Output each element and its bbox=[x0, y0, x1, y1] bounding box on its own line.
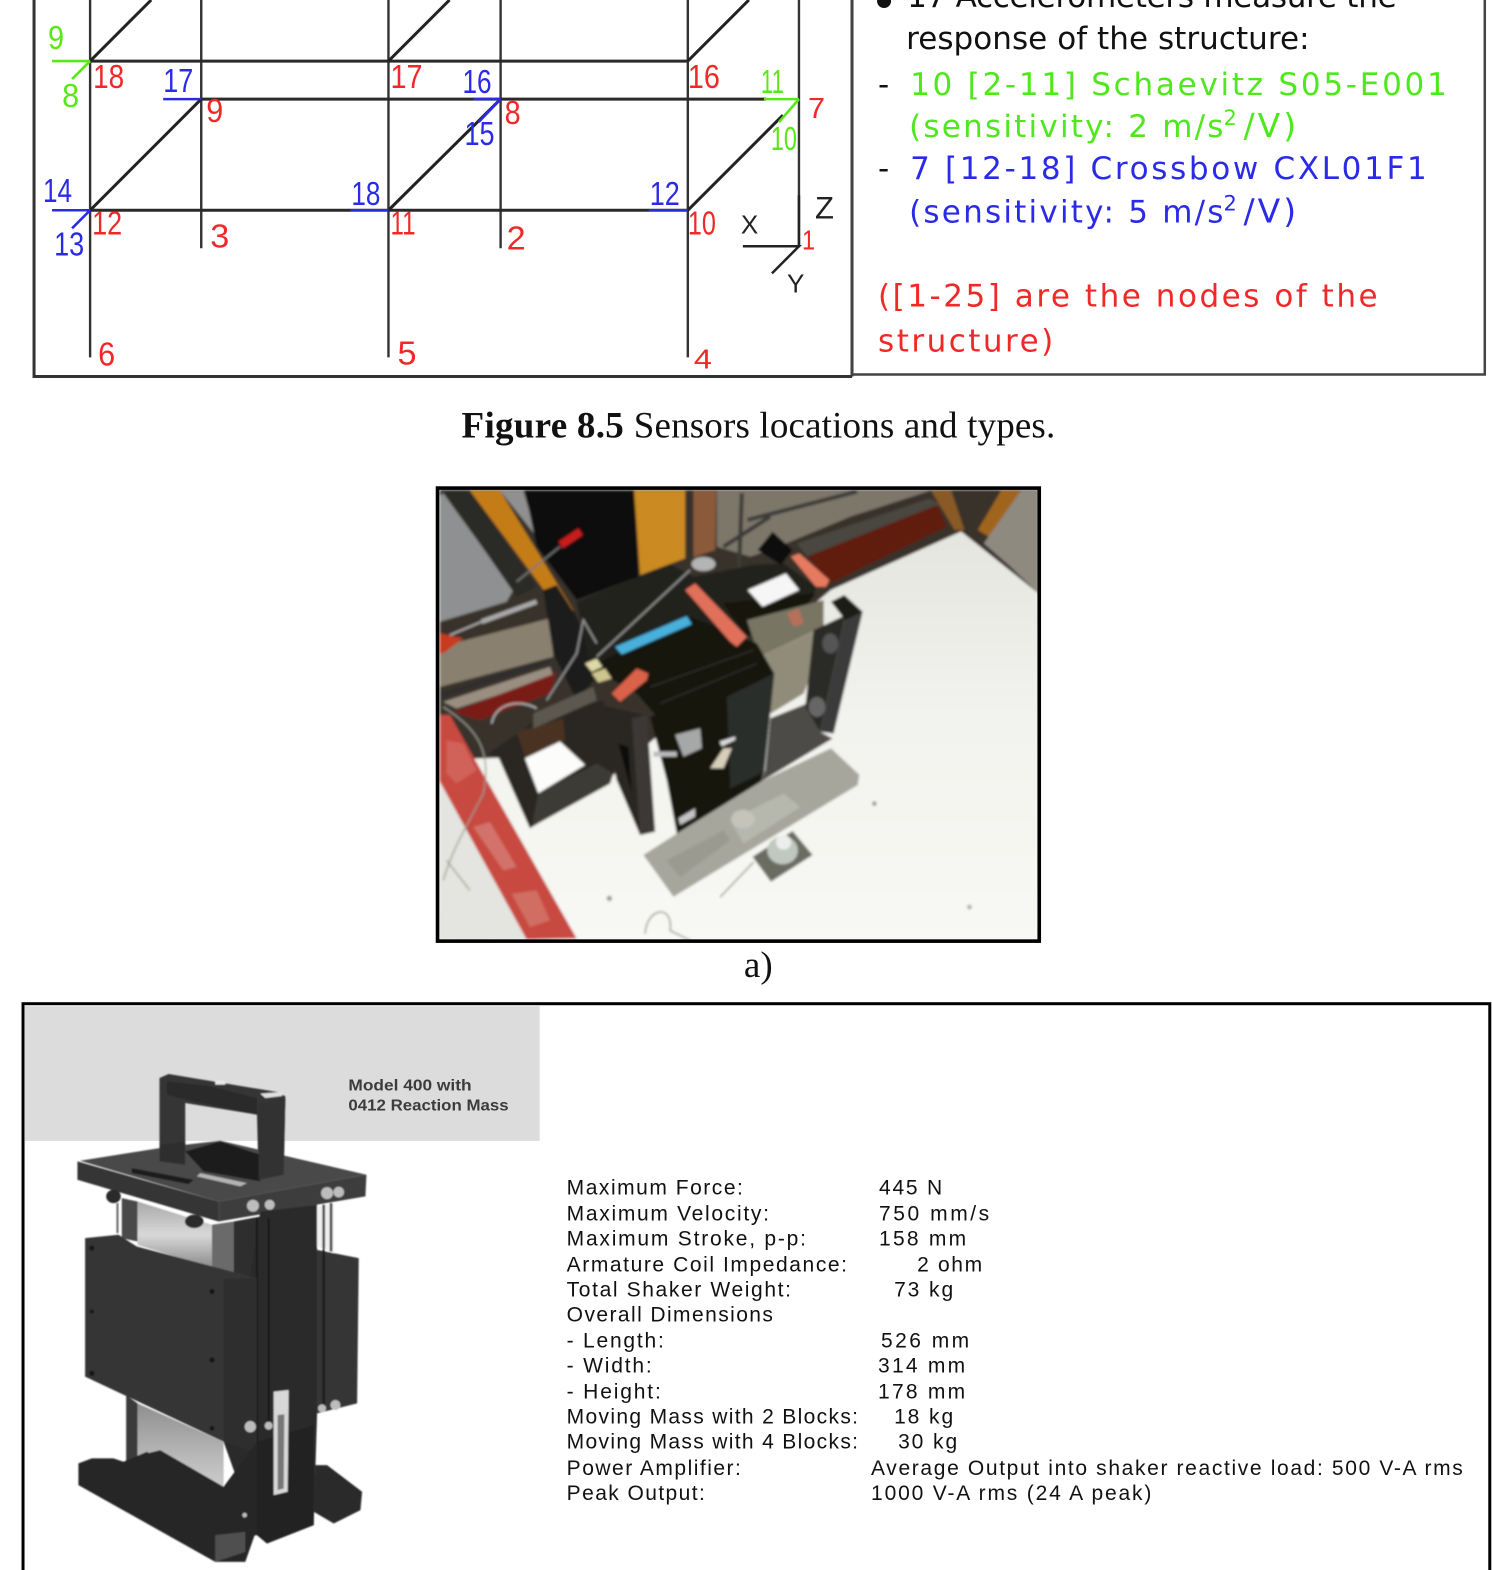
photo caption: 0412 Reaction Mass bbox=[348, 1097, 509, 1114]
shaker product photo bbox=[25, 1006, 540, 1562]
upper silver armature bbox=[137, 1201, 212, 1268]
figure caption: Figure 8.5 bbox=[462, 406, 624, 447]
specification values: 314 mm bbox=[878, 1355, 965, 1378]
node numbers in red: 12 bbox=[92, 204, 122, 241]
specification labels: - Length: bbox=[567, 1330, 664, 1353]
specification labels: - Height: bbox=[567, 1381, 661, 1404]
node numbers in red: 17 bbox=[390, 58, 423, 95]
slab top lit corner bbox=[637, 532, 1038, 940]
specification values: 158 mm bbox=[879, 1227, 966, 1250]
accelerometer numbers in blue: 16 bbox=[463, 63, 492, 100]
photo caption bbox=[348, 1077, 509, 1114]
specification labels: Peak Output: bbox=[567, 1482, 705, 1505]
accelerometer numbers in blue: 12 bbox=[650, 175, 680, 212]
right end frame bbox=[805, 615, 845, 732]
accelerometer numbers in green: 11 bbox=[761, 63, 784, 100]
shaker back section bbox=[577, 563, 816, 667]
axes labels: X bbox=[741, 209, 758, 239]
legend text: - bbox=[878, 67, 889, 103]
specification values: Average Output into shaker reactive load: 500 V-A rms bbox=[871, 1457, 1463, 1480]
figure caption: Sensors locations and types. bbox=[634, 406, 1055, 447]
legend text: (sensitivity: 5 m/s bbox=[909, 194, 1223, 230]
lower-left background stripes bbox=[440, 618, 553, 687]
specification labels: Moving Mass with 4 Blocks: bbox=[567, 1431, 858, 1454]
node numbers in red: 11 bbox=[390, 204, 415, 241]
handle bbox=[160, 1074, 285, 1180]
specification labels: Armature Coil Impedance: bbox=[567, 1254, 847, 1277]
lower silver armature bbox=[137, 1403, 224, 1492]
label a): a) bbox=[744, 945, 773, 986]
legend text: 10 [2-11] Schaevitz S05-E001 bbox=[910, 67, 1447, 103]
sensor layout diagram bbox=[34, 0, 852, 376]
specification labels: Overall Dimensions bbox=[567, 1304, 773, 1327]
legend text: 2 bbox=[1223, 190, 1237, 215]
axes labels: Z bbox=[815, 190, 834, 225]
specification values: 2 ohm bbox=[917, 1254, 982, 1277]
legend text: (sensitivity: 2 m/s bbox=[909, 109, 1223, 145]
accelerometer numbers in blue: 17 bbox=[163, 62, 193, 99]
legend text: 7 [12-18] Crossbow CXL01F1 bbox=[910, 151, 1427, 187]
specification values: 73 kg bbox=[894, 1279, 953, 1302]
node numbers in red: 16 bbox=[688, 58, 720, 95]
bolts bbox=[242, 1187, 344, 1517]
shaker left reaction frame bbox=[488, 700, 615, 828]
axes labels bbox=[741, 190, 834, 298]
specification labels: - Width: bbox=[567, 1355, 652, 1378]
dark background bbox=[440, 490, 1038, 759]
specification values: 526 mm bbox=[881, 1330, 969, 1353]
central column bbox=[224, 1205, 317, 1544]
accelerometer numbers in blue bbox=[43, 62, 680, 262]
specification labels bbox=[567, 1176, 858, 1505]
accelerometer numbers in blue: 13 bbox=[54, 225, 84, 262]
node numbers in red: 5 bbox=[397, 334, 416, 371]
top plate bbox=[80, 1141, 366, 1201]
grey base plate bbox=[643, 748, 859, 897]
node numbers in red: 6 bbox=[98, 335, 115, 372]
legend text: response of the structure: bbox=[906, 21, 1310, 57]
legend text bbox=[877, 0, 1447, 359]
accelerometer numbers in green bbox=[48, 19, 797, 157]
specification values bbox=[871, 1176, 1463, 1505]
node numbers in red: 1 bbox=[802, 224, 815, 255]
accelerometer numbers in blue: 18 bbox=[351, 175, 380, 212]
specification labels: Maximum Stroke, p-p: bbox=[567, 1227, 806, 1250]
specification labels: Moving Mass with 2 Blocks: bbox=[567, 1406, 858, 1429]
node numbers in red: 3 bbox=[210, 217, 229, 254]
node numbers in red: 2 bbox=[507, 219, 526, 256]
specification values: 178 mm bbox=[878, 1381, 965, 1404]
specification values: 1000 V-A rms (24 A peak) bbox=[871, 1482, 1151, 1505]
rear rods and rear block bbox=[317, 1203, 334, 1253]
photo caption: Model 400 with bbox=[348, 1077, 472, 1094]
legend text: 2 bbox=[1223, 105, 1237, 130]
specification labels: Total Shaker Weight: bbox=[567, 1279, 791, 1302]
photo a: shaker on roof slab bbox=[438, 488, 1039, 941]
labels, handles and connectors bbox=[615, 616, 692, 654]
sensors legend panel bbox=[852, 0, 1485, 374]
specification values: 30 kg bbox=[898, 1431, 957, 1454]
specification labels: Maximum Force: bbox=[567, 1176, 743, 1199]
specification values: 18 kg bbox=[894, 1406, 953, 1429]
floor slab bbox=[440, 490, 1038, 940]
base bbox=[140, 1442, 257, 1542]
accelerometer numbers in green: 9 bbox=[48, 19, 64, 56]
node numbers in red: 9 bbox=[206, 92, 223, 129]
legend text: /V) bbox=[1243, 191, 1299, 230]
node numbers in red bbox=[92, 58, 825, 374]
legend text: structure) bbox=[878, 323, 1053, 359]
sensor pad bbox=[753, 831, 813, 882]
specification values: 445 N bbox=[879, 1176, 942, 1199]
panel b: shaker specifications bbox=[23, 1004, 1490, 1570]
accelerometer numbers in blue: 14 bbox=[43, 172, 72, 209]
shaker centre block bbox=[600, 705, 655, 835]
sensor arrows bbox=[52, 61, 799, 228]
accelerometer numbers in green: 10 bbox=[771, 120, 797, 157]
legend text: - bbox=[878, 151, 889, 187]
main block bbox=[85, 1235, 257, 1452]
red beam bbox=[440, 715, 577, 939]
legend text: /V) bbox=[1243, 106, 1299, 145]
legend text: ([1-25] are the nodes of the bbox=[878, 278, 1378, 314]
side label bbox=[274, 1390, 289, 1495]
specification labels: Power Amplifier: bbox=[567, 1457, 741, 1480]
node numbers in red: 4 bbox=[694, 343, 712, 374]
node numbers in red: 10 bbox=[688, 204, 716, 241]
specification values: 750 mm/s bbox=[879, 1202, 989, 1225]
node numbers in red: 8 bbox=[505, 94, 521, 131]
accelerometer numbers in blue: 15 bbox=[465, 115, 495, 152]
node numbers in red: 18 bbox=[93, 58, 124, 95]
accelerometer numbers in green: 8 bbox=[62, 77, 79, 114]
node numbers in red: 7 bbox=[808, 93, 825, 125]
specification labels: Maximum Velocity: bbox=[567, 1202, 769, 1225]
axes labels: Y bbox=[787, 268, 804, 298]
